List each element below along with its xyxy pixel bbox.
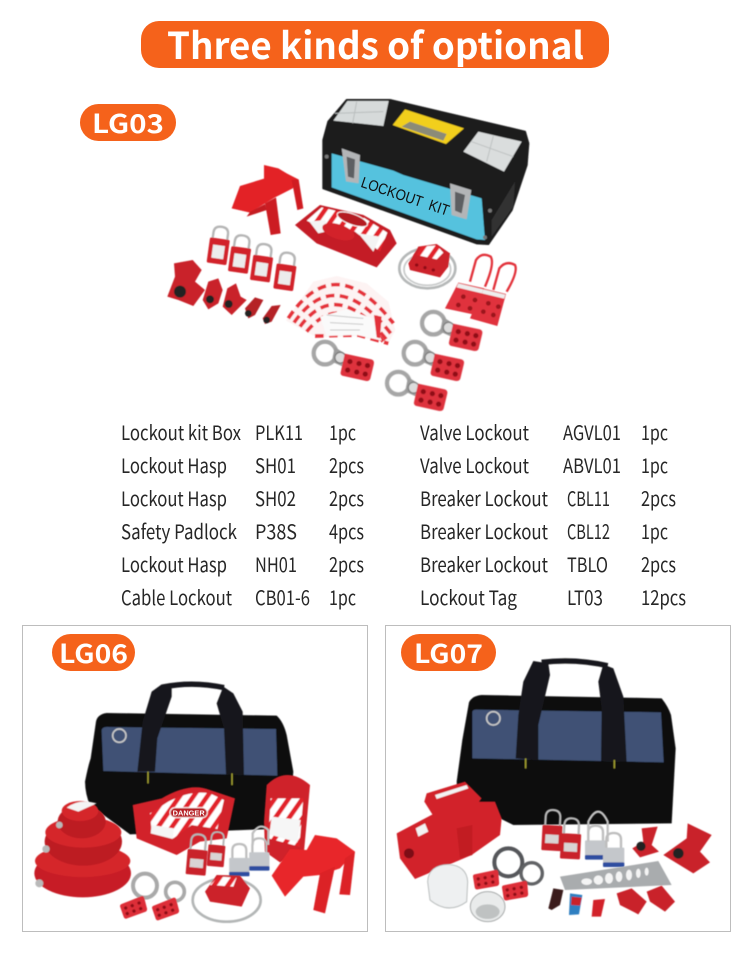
panel: LG07 (386, 626, 730, 932)
parts table: left column: CB01-6 (255, 582, 310, 611)
icons: nylon hasps (445, 255, 516, 326)
icon: plug cover lockout (264, 775, 310, 862)
icon: toolbox (323, 100, 528, 244)
parts table: left column: 2pcs (329, 450, 364, 479)
product photo: LG07 bag kit (397, 661, 712, 922)
text: danger sign: DANGER (173, 808, 205, 817)
parts table: left column: P38S (255, 516, 297, 545)
parts table: left column: 1pc (329, 582, 356, 611)
parts table: left column: NH01 (255, 549, 297, 578)
parts table: right column: 2pcs (641, 483, 676, 512)
parts table: right column: Breaker Lockout (420, 549, 548, 578)
label: LG06: LG06 (59, 634, 128, 671)
icon: cable lockout (399, 244, 455, 288)
parts table: left column: 2pcs (329, 549, 364, 578)
label: LG07: LG07 (414, 634, 483, 671)
label: LG03: LG03 (92, 104, 164, 141)
icon: ball valve lockout (232, 165, 303, 235)
parts table: right column: 12pcs (641, 582, 686, 611)
icon: lockout tags (286, 276, 395, 343)
parts table: right column: 2pcs (641, 549, 676, 578)
title: Three kinds of optional (167, 16, 584, 70)
parts table: left column: Lockout kit Box (121, 417, 241, 446)
icons: padlocks (541, 810, 624, 867)
icon: tool bag (85, 684, 293, 834)
parts table: right column: Lockout Tag (420, 582, 517, 611)
parts table: right column (420, 417, 686, 611)
parts table: right column: LT03 (567, 582, 603, 611)
parts table: left column: Lockout Hasp (121, 549, 227, 578)
parts table: left column: Safety Padlock (121, 516, 237, 545)
parts table: right column: Valve Lockout (420, 450, 529, 479)
icons: breaker lockouts (632, 823, 712, 873)
icons: steel hasps (116, 874, 184, 926)
icons: safety padlocks (207, 225, 298, 291)
parts table: right column: CBL11 (567, 483, 610, 512)
icons: steel hasps (314, 312, 482, 411)
parts table: left column: 1pc (329, 417, 356, 446)
icon: steel lockout bar (560, 861, 672, 890)
icon: ball valve lockout (272, 835, 355, 913)
panel: LG06 (22, 626, 368, 932)
parts table: right column: CBL12 (567, 516, 610, 545)
icons: miniature breaker lockouts (548, 886, 675, 917)
icon: gate valve lockout (133, 787, 235, 855)
icon: stacked gate valve lockouts (34, 801, 131, 897)
parts table: left column: Lockout Hasp (121, 483, 227, 512)
parts table: left column: Cable Lockout (121, 582, 232, 611)
icons: breaker lockouts (167, 260, 281, 324)
label: LG07 (401, 634, 496, 671)
parts table: right column: 1pc (641, 516, 668, 545)
parts table: right column: Valve Lockout (420, 417, 529, 446)
product photo: LG03 lockout kit (167, 100, 528, 411)
text: toolbox label: LOCKOUT KIT (359, 174, 452, 220)
parts table: right column: ABVL01 (563, 450, 621, 479)
icons: padlocks (186, 827, 269, 876)
icons: clear push-button covers (428, 864, 505, 922)
product photo: LG06 bag kit (34, 684, 355, 926)
icon: tool bag (457, 661, 676, 825)
icon: gate valve lockout (295, 205, 397, 267)
parts table: left column (121, 417, 364, 611)
parts table: left column: Lockout Hasp (121, 450, 227, 479)
parts table: left column: SH01 (255, 450, 296, 479)
label: LG03 (80, 104, 176, 141)
parts table: right column: 1pc (641, 417, 668, 446)
icon: plug lockouts (397, 782, 502, 879)
icons: steel hasps (469, 848, 542, 907)
parts table: right column: AGVL01 (563, 417, 621, 446)
parts table: right column: Breaker Lockout (420, 516, 548, 545)
parts table: right column: 1pc (641, 450, 668, 479)
parts table: left column: 2pcs (329, 483, 364, 512)
parts table: right column: TBLO (567, 549, 608, 578)
parts table: left column: 4pcs (329, 516, 364, 545)
icon: cable lockout (193, 875, 261, 922)
parts table: left column: SH02 (255, 483, 296, 512)
parts table: left column: PLK11 (255, 417, 303, 446)
parts table: right column: Breaker Lockout (420, 483, 548, 512)
